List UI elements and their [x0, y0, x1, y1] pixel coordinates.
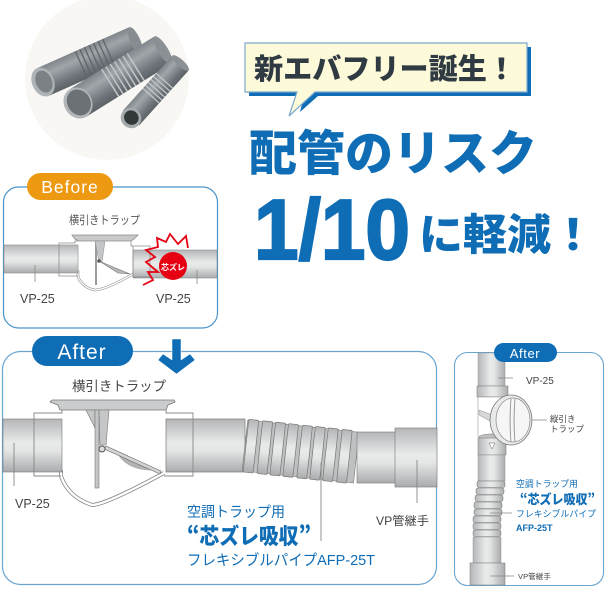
arrow: before to after — [158, 339, 195, 374]
label: VP-25: VP-25 — [15, 497, 50, 511]
after badge with arrow — [32, 336, 133, 366]
pipe 2 — [58, 34, 176, 124]
leader lines — [35, 265, 197, 284]
product callout: 空調トラップ用 — [187, 504, 285, 521]
label: left VP-25: VP-25 — [20, 292, 55, 306]
upper pipe — [478, 353, 505, 386]
bubble text: 新エバフリー誕生！ — [254, 46, 516, 88]
trap body inner — [61, 470, 164, 505]
label: vertical trap — [550, 414, 585, 434]
product callout: フレキシブルパイプAFP-25T — [187, 551, 375, 569]
label: right VP-25: VP-25 — [156, 292, 191, 306]
right misaligned pipe — [133, 250, 217, 278]
sockets and lid — [59, 235, 150, 278]
round trap disc — [490, 395, 532, 445]
VP coupling — [470, 563, 505, 585]
flexible section — [473, 481, 505, 536]
mid pipe — [478, 455, 505, 481]
product callout: “芯ズレ吸収” — [187, 519, 311, 551]
label: VP coupling: VP管継手 — [518, 571, 551, 581]
before badge: Before — [41, 177, 99, 197]
main title line 1: 配管のリスク — [249, 114, 537, 184]
trap body outline — [61, 470, 164, 505]
panel: before — [4, 187, 218, 328]
label: VP coupling: VP管継手 — [376, 513, 429, 528]
main title line 2: 1/10 — [254, 183, 410, 278]
photo: grey flexible pipes — [25, 0, 191, 160]
pipe 1 — [27, 25, 146, 100]
after badge with arrow: After — [57, 341, 107, 364]
product callout — [516, 479, 596, 533]
inner valve — [86, 410, 161, 488]
trap body — [78, 270, 133, 290]
trap lid — [50, 400, 175, 410]
panel: after vertical — [454, 352, 604, 586]
product callout: 空調トラップ用 — [516, 479, 578, 489]
inner arm — [479, 410, 492, 422]
label: VP-25: VP-25 — [526, 376, 554, 387]
before badge — [27, 173, 113, 200]
label: vertical trap: トラップ — [550, 424, 585, 434]
right pipe — [166, 419, 245, 472]
outlet pipe — [357, 432, 396, 483]
trap body inner — [78, 270, 133, 290]
label: horizontal trap: 横引きトラップ — [72, 379, 166, 394]
leader lines — [14, 443, 417, 541]
product callout — [187, 504, 375, 569]
burst label: 芯ズレ — [161, 262, 185, 272]
trap body — [478, 397, 507, 437]
flexible section — [242, 419, 359, 484]
upper socket — [477, 386, 508, 397]
product callout: “芯ズレ吸収” — [520, 489, 595, 508]
pipe 3 — [116, 53, 191, 133]
speech bubble headline — [245, 43, 531, 116]
leader lines — [490, 378, 547, 576]
panel: after main — [2, 352, 437, 584]
after badge small: After — [510, 346, 540, 361]
lower socket — [478, 434, 506, 455]
left pipe — [4, 245, 78, 273]
sockets — [34, 410, 193, 476]
main title line 2 — [254, 183, 595, 278]
misalignment burst — [143, 234, 188, 285]
label: horizontal trap: 横引きトラップ — [69, 213, 140, 227]
main title line 2: に軽減！ — [419, 201, 595, 263]
product callout: AFP-25T — [516, 523, 553, 533]
inner valve — [95, 241, 130, 285]
label: vertical trap: 縦引き — [550, 414, 576, 424]
VP coupling — [395, 428, 437, 487]
lower pipe — [473, 537, 501, 563]
product callout: フレキシブルパイプ — [516, 508, 596, 519]
after badge small — [494, 343, 557, 362]
left pipe — [3, 419, 62, 472]
